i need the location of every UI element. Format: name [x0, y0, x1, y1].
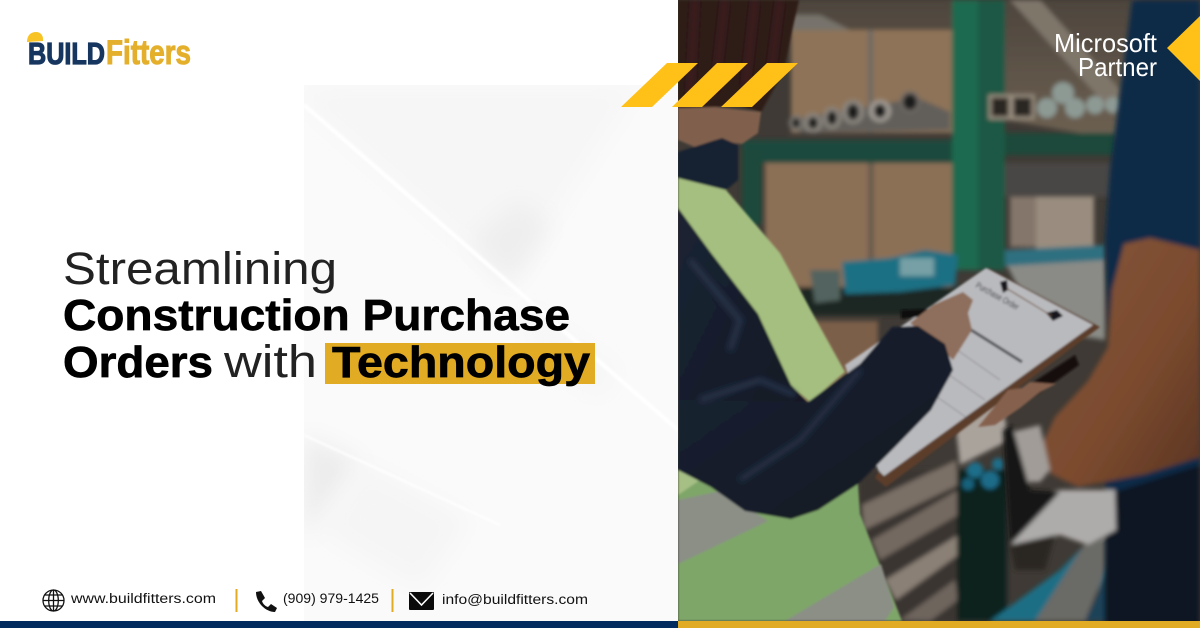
website: www.buildfitters.com	[70, 591, 216, 606]
warehouse ceiling and back wall	[780, 0, 1140, 140]
icon: envelope	[409, 592, 434, 610]
pipes below clipboard	[888, 486, 962, 618]
title: Construction Purchase	[63, 291, 570, 340]
jacket sleeve	[678, 326, 953, 519]
background panel: faceted light gray	[304, 94, 614, 578]
highlight: Technology: Technology	[332, 338, 591, 387]
icon: phone	[256, 591, 277, 612]
blue fittings and lower shelf	[800, 287, 980, 315]
person left: hair, face, jacket and vest	[678, 0, 1100, 621]
dark column with blue fittings	[957, 470, 1007, 621]
person right: navy shirt and arm	[1003, 0, 1200, 628]
logo: BuildFitters: BUILD	[28, 36, 105, 71]
badge diamond	[1167, 16, 1200, 81]
title: Orders	[63, 338, 213, 387]
clipboard with purchase order: Purchase Order	[974, 280, 1021, 312]
cardboard boxes	[791, 30, 952, 133]
hand with pen	[901, 309, 932, 319]
email: info@buildfitters.com	[442, 592, 588, 607]
title: Streamlining	[63, 243, 337, 294]
badge: Microsoft Partner: Microsoft	[1054, 28, 1158, 58]
bottom bar: navy	[0, 621, 678, 628]
icon: globe	[43, 590, 64, 611]
icon: hard hat	[27, 32, 43, 42]
square tubes and round pipes	[990, 96, 1010, 118]
badge: Microsoft Partner: Partner	[1078, 52, 1157, 82]
title: with	[223, 336, 317, 387]
lower hand and dark device	[1034, 354, 1080, 384]
chevron stripes	[621, 63, 798, 107]
title	[63, 243, 595, 387]
green shelving	[742, 140, 952, 163]
badge: Microsoft Partner	[1054, 16, 1200, 82]
logo: BuildFitters	[27, 32, 191, 72]
clipboard with purchase order	[845, 268, 1100, 487]
bottom bar: gold	[678, 621, 1200, 628]
pipe stack on shelf	[789, 91, 950, 133]
white work glove	[1012, 425, 1050, 482]
footer contact row	[43, 589, 588, 612]
phone number: (909) 979-1425	[283, 591, 379, 606]
photo: workers reviewing purchase order in warehouse	[678, 0, 1200, 628]
teal tubes	[988, 548, 1107, 621]
logo: BuildFitters: Fitters	[106, 34, 191, 72]
